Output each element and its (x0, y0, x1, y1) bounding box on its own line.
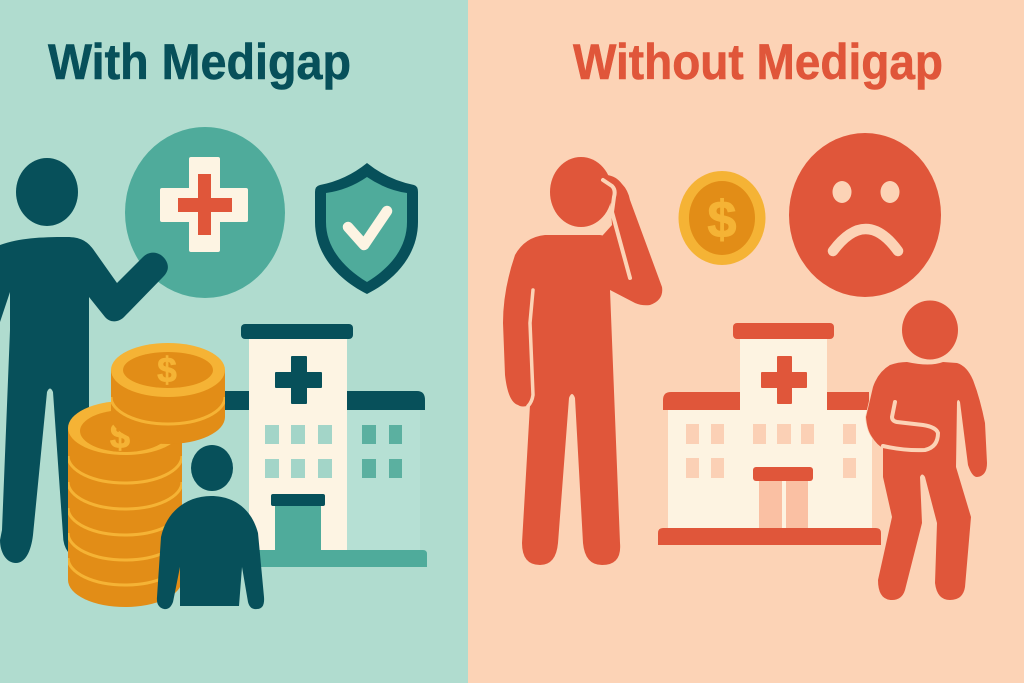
hospital building (658, 323, 881, 545)
upper coin stack (111, 343, 225, 444)
figure: person holding stomach (866, 300, 987, 600)
heading: with medigap: With Medigap (48, 34, 351, 90)
icon: dollar coin: $ (708, 191, 737, 249)
lower coin stack (68, 401, 182, 607)
icon: shield with check (315, 163, 418, 294)
panel: without medigap (468, 0, 1024, 683)
figure: worried adult holding head (503, 157, 662, 565)
figure: seated person seen from behind (157, 445, 264, 609)
panel: with medigap (0, 0, 468, 683)
icon: dollar coin (678, 171, 766, 265)
upper coin stack: $ (157, 351, 177, 390)
figure: standing adult pointing (0, 158, 168, 563)
heading: without medigap: Without Medigap (573, 34, 943, 90)
hospital building (225, 324, 427, 567)
icon: medical cross circle (125, 127, 285, 298)
icon: sad face (789, 133, 941, 297)
icon: coin stacks (68, 343, 225, 607)
lower coin stack: $ (110, 415, 130, 456)
